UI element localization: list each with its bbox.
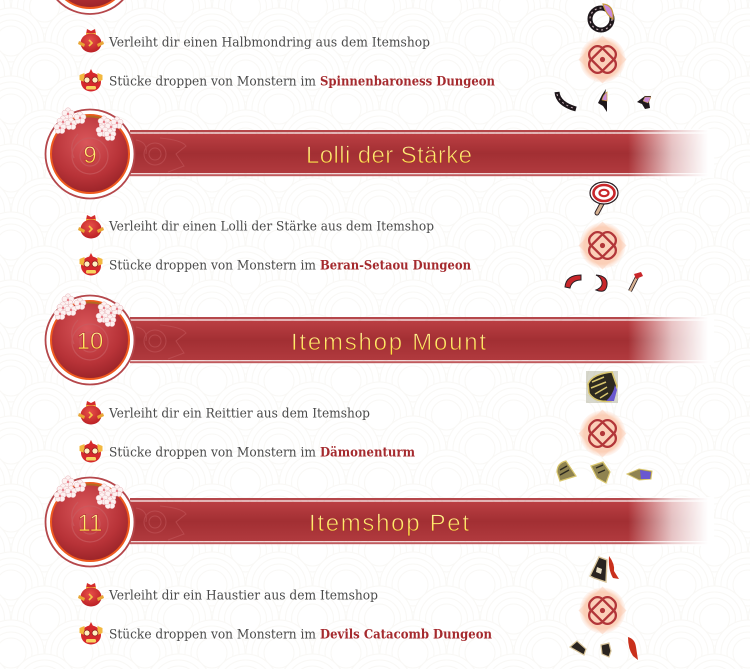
text: drop source: Stücke droppen von Monstern im — [109, 444, 316, 460]
banner 10 — [130, 316, 714, 365]
icons: mount pieces — [557, 461, 652, 483]
icon: combine symbol — [578, 222, 626, 270]
icon: mount scroll — [586, 371, 618, 403]
text: drop source — [109, 258, 471, 272]
banner 9 — [130, 129, 714, 178]
icon: lion head — [80, 440, 102, 462]
icon: lucky bag — [78, 401, 104, 424]
medal 9 — [46, 108, 134, 198]
icon: lucky bag — [78, 583, 104, 606]
medal 11 — [46, 476, 134, 566]
icon: lion head — [80, 253, 102, 276]
section 10: Itemshop Mount — [46, 294, 714, 483]
icons: pet charm pieces — [570, 637, 638, 660]
text: reward description: Verleiht dir einen Lolli der Stärke aus dem Itemshop — [108, 218, 434, 234]
icon: pet charm — [590, 556, 619, 582]
text: reward description: Verleiht dir ein Haustier aus dem Itemshop — [108, 588, 378, 602]
text: reward description: Verleiht dir einen Halbmondring aus dem Itemshop — [108, 34, 430, 50]
icon: lollipop — [590, 182, 618, 213]
text: drop source: Stücke droppen von Monstern im — [109, 626, 316, 642]
banner 11 — [130, 497, 714, 546]
icon: combine symbol — [578, 586, 626, 634]
text: drop source: Stücke droppen von Monstern im — [109, 258, 316, 272]
text: drop source: Dämonenturm — [320, 444, 416, 460]
text: drop source: Spinnenbaroness Dungeon — [320, 74, 495, 88]
medal remnant: section 8 — [45, 0, 135, 14]
icon: lucky bag — [78, 29, 104, 52]
icon: combine symbol — [578, 36, 626, 84]
number 10: 10 — [77, 328, 103, 355]
icon: lion head — [80, 69, 102, 92]
icon: crescent ring — [590, 4, 613, 30]
icon: lucky bag — [78, 215, 104, 238]
icons: ring pieces — [557, 89, 651, 112]
heading: Itemshop Mount — [291, 329, 486, 356]
icons: lollipop pieces — [565, 272, 643, 291]
section 8: crescent ring — [78, 4, 651, 112]
text: drop source: Beran-Setaou Dungeon — [320, 258, 471, 272]
icon: lion head — [80, 622, 102, 644]
text: drop source: Devils Catacomb Dungeon — [320, 626, 492, 642]
text: drop source — [109, 74, 495, 88]
heading: Itemshop Pet — [309, 510, 469, 537]
heading: Lolli der Stärke — [306, 142, 472, 169]
icon: combine symbol — [578, 410, 626, 458]
number 11: 11 — [78, 510, 102, 537]
text: reward description: Verleiht dir ein Reittier aus dem Itemshop — [108, 406, 370, 420]
text: drop source — [109, 444, 416, 460]
section 9: Lolli der Stärke — [46, 108, 714, 291]
text: drop source: Stücke droppen von Monstern im — [109, 74, 316, 88]
number 9: 9 — [83, 142, 97, 169]
text: drop source — [109, 626, 492, 642]
medal 10 — [46, 294, 134, 384]
section 11: Itemshop Pet — [46, 476, 714, 660]
